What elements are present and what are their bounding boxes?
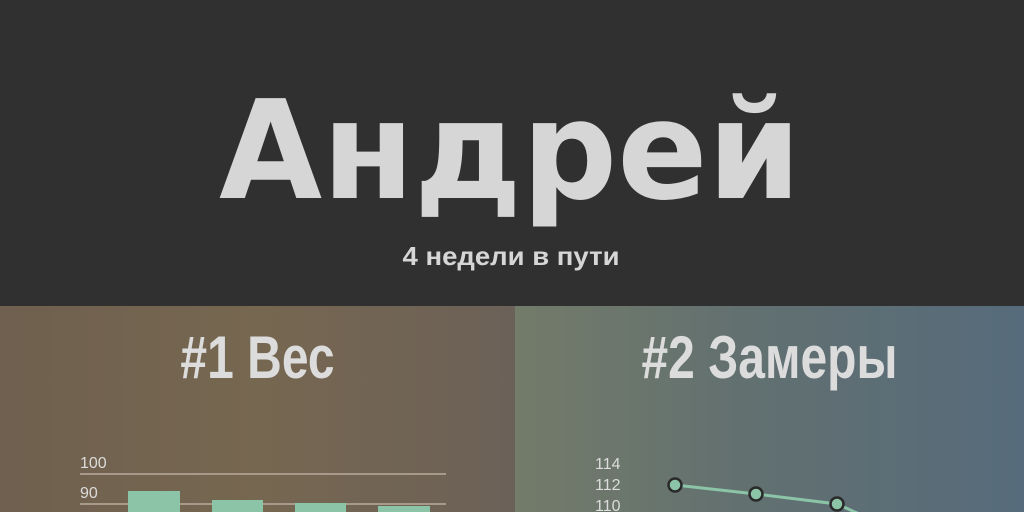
panel: weight: [0, 306, 515, 512]
line chart: measurements: 114: [595, 456, 621, 473]
heading: weight: #1 Вес: [180, 324, 335, 391]
bar chart: weight: 100: [80, 455, 107, 472]
title: Андрей: [219, 72, 801, 231]
bar chart: weight: 90: [80, 485, 98, 502]
line chart: measurements: 112: [595, 477, 621, 494]
subtitle: 4 недели в пути: [402, 241, 620, 271]
heading: measurements: #2 Замеры: [641, 324, 898, 391]
line chart: measurements: [595, 456, 858, 512]
header: title and subtitle: [219, 72, 801, 271]
panel: measurements: [515, 306, 1024, 512]
bar chart: weight: [80, 455, 446, 512]
